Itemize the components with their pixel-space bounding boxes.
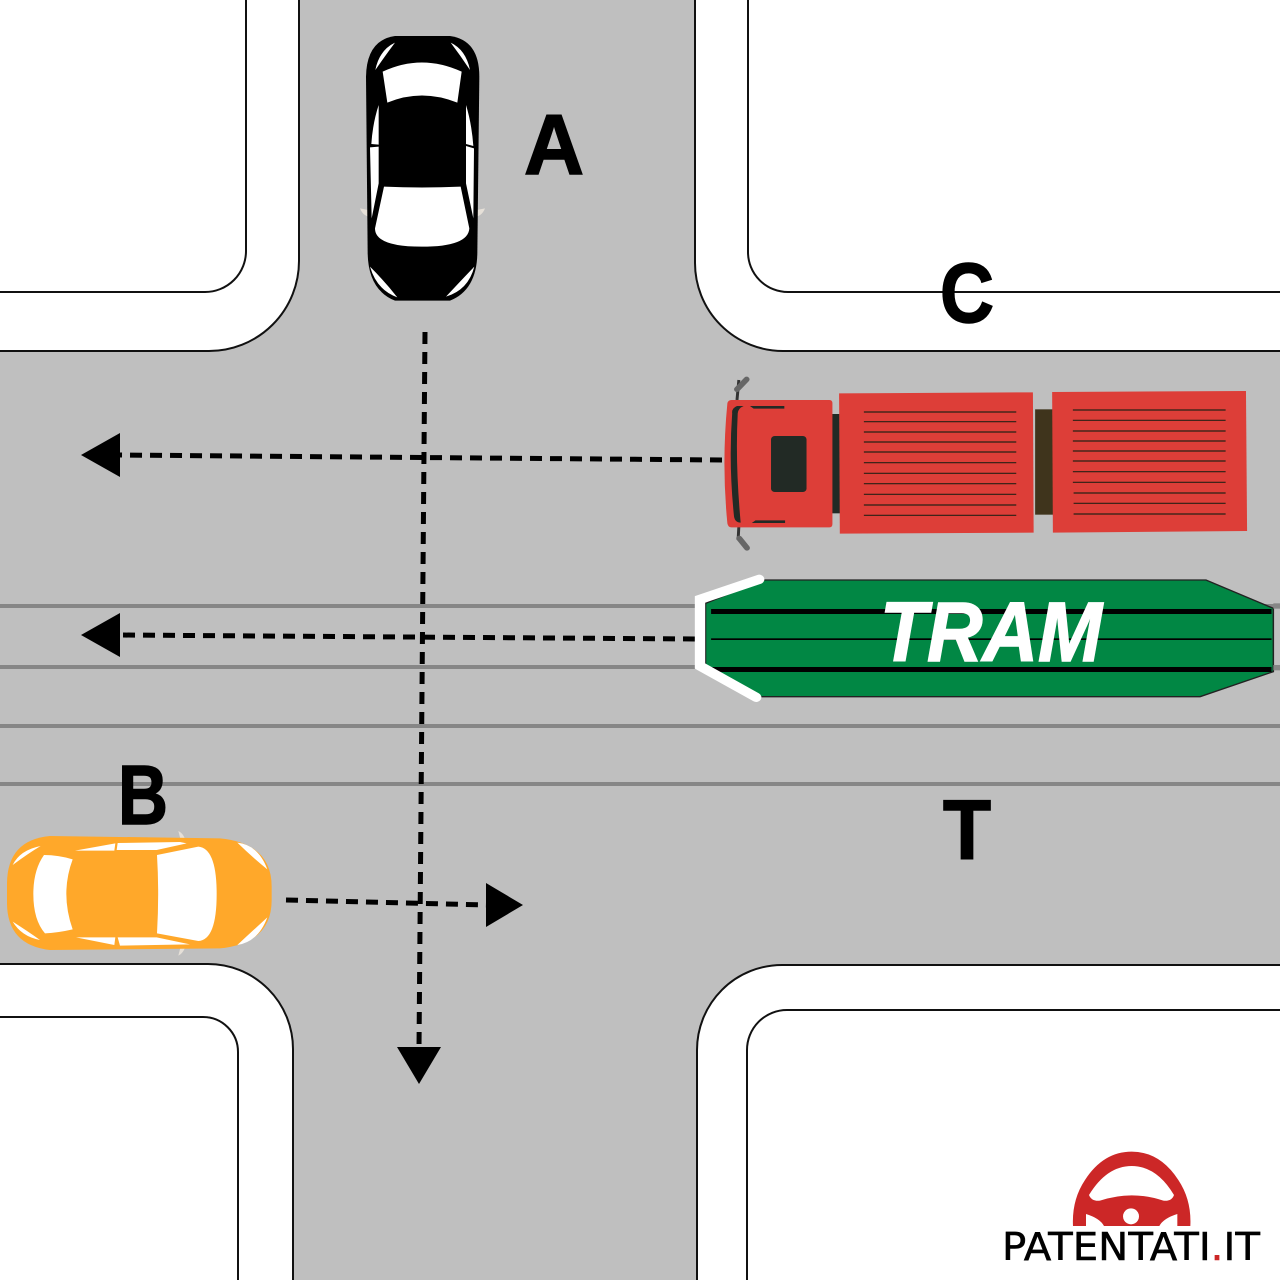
- top-left pavement block: [0, 0, 299, 351]
- label A: A: [524, 98, 584, 193]
- bottom-left pavement block: [0, 964, 293, 1280]
- arrow: car A straight ahead: [397, 332, 441, 1084]
- car B: orange car: [7, 831, 272, 956]
- bottom-right pavement block: [697, 965, 1280, 1280]
- label C: C: [940, 246, 994, 340]
- arrow: truck C straight ahead: [81, 433, 722, 477]
- logo: Patentati.it: [1002, 1152, 1261, 1269]
- label B: B: [118, 748, 168, 842]
- arrow: car B straight ahead: [286, 883, 523, 927]
- top-right pavement block: [695, 0, 1280, 351]
- label T: T: [943, 783, 991, 877]
- tram: [700, 579, 1280, 697]
- arrow: tram straight ahead: [81, 613, 695, 657]
- car A: black car: [360, 36, 485, 301]
- logo wordmark: PATENTATI .IT: [1002, 1225, 1261, 1269]
- truck C: red truck with trailer: [724, 379, 1247, 548]
- logo steering wheel: [1073, 1152, 1190, 1226]
- tram label: TRAM: [880, 585, 1104, 679]
- tram tracks: [0, 606, 1280, 784]
